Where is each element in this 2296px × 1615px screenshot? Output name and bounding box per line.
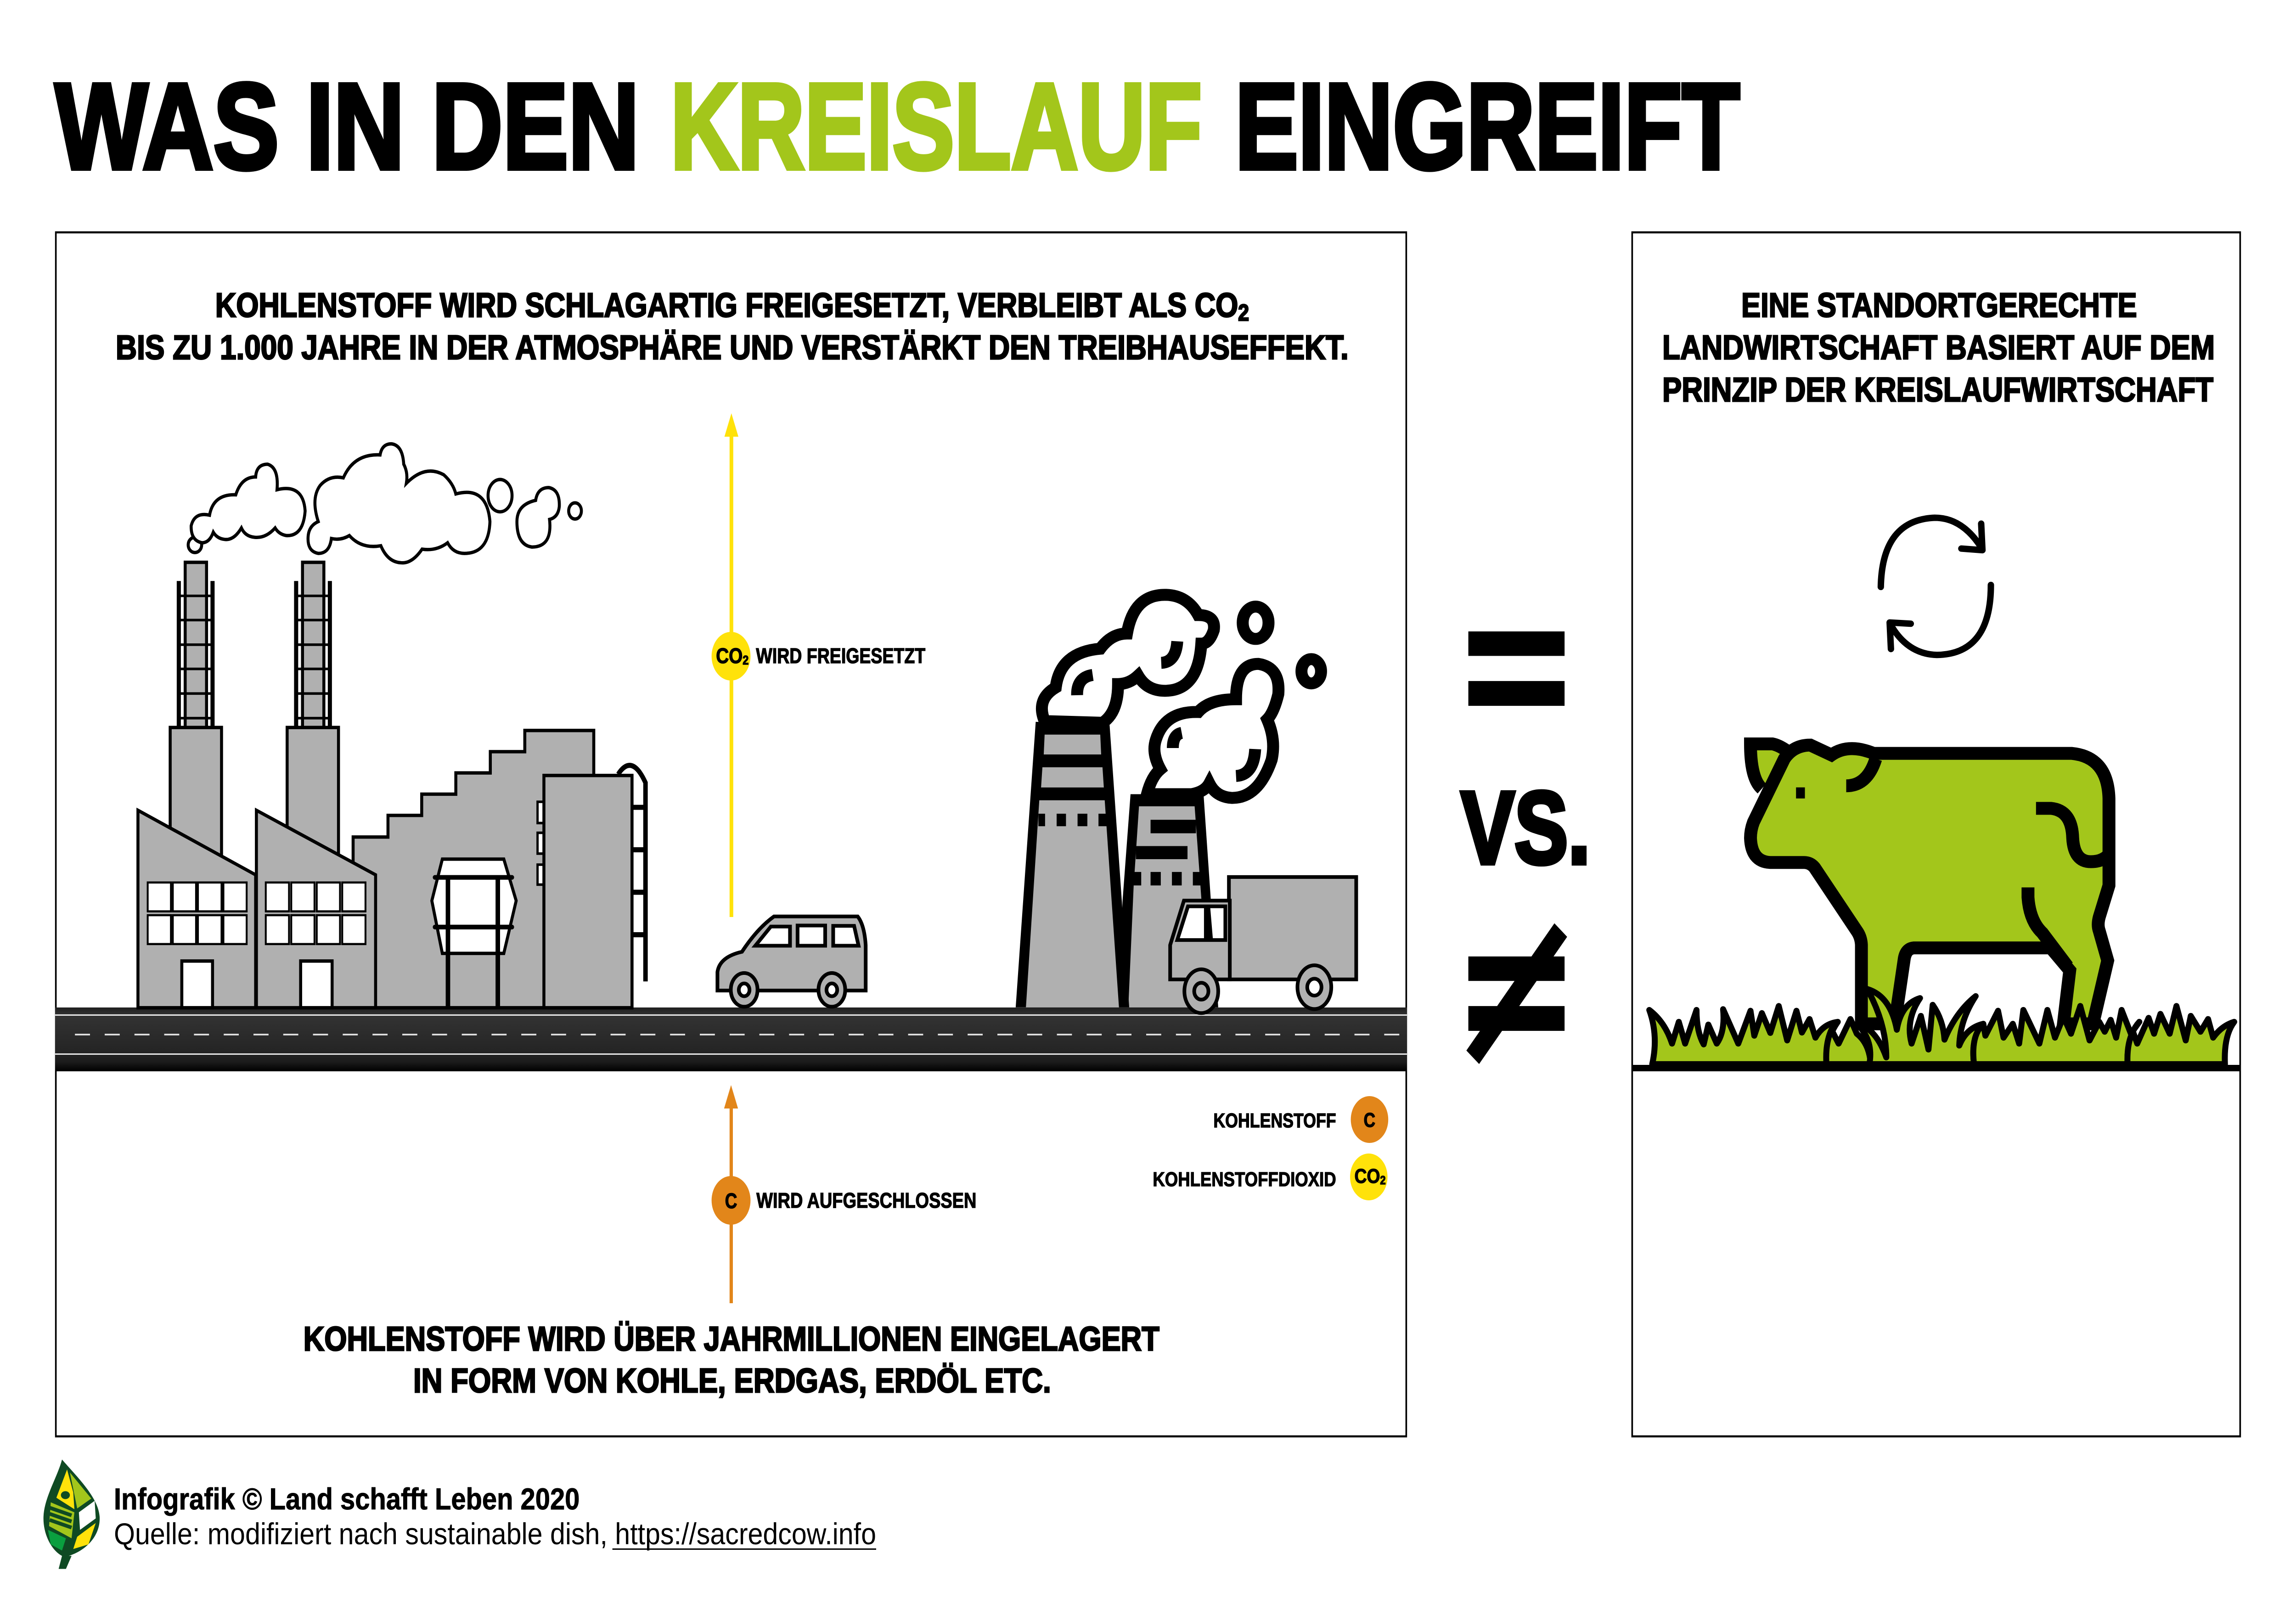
heading: carbon released <box>116 287 1349 367</box>
title: KREISLAUF <box>670 58 1202 195</box>
label: CO2 released: 2 <box>743 653 748 668</box>
label: CO2 released <box>712 632 925 681</box>
heading: carbon released: 2 <box>1238 300 1249 326</box>
legend <box>1153 1096 1388 1200</box>
steam cloud rear <box>1147 664 1278 798</box>
heading: circular agriculture <box>1662 287 2215 409</box>
panel: circular agriculture <box>1632 232 2240 1436</box>
cooling tower front <box>1016 722 1129 1007</box>
heading: circular agriculture: PRINZIP DER KREISLAUFWIRTSCHAFT <box>1662 371 2213 409</box>
legend: CO <box>1355 1165 1379 1187</box>
title: EINGREIFT <box>1235 58 1740 195</box>
shed building left <box>138 810 256 1008</box>
legend: KOHLENSTOFF <box>1213 1109 1336 1132</box>
power plant and vehicles <box>717 595 1356 1013</box>
equals sign <box>1469 631 1564 706</box>
stepped factory hall <box>353 731 632 1008</box>
label: CO2 released: CO <box>716 644 741 668</box>
truck <box>1170 877 1356 1013</box>
steam bubbles <box>1243 607 1321 683</box>
icon: cycle arrows <box>1881 518 1991 655</box>
ground line <box>1632 1065 2240 1071</box>
factory tower <box>544 776 632 1008</box>
arrow: CO2 released <box>725 413 738 917</box>
cooling tower rear <box>1119 794 1218 1007</box>
steam cloud front <box>1042 595 1214 723</box>
footer source: Quelle: modifiziert nach sustainable dish, https://sacredcow.info <box>114 1517 876 1551</box>
text: carbon stored: KOHLENSTOFF WIRD ÜBER JAHRMILLIONEN EINGELAGERT <box>304 1320 1159 1358</box>
label: carbon unlocked: C <box>725 1189 737 1213</box>
heading: carbon released: BIS ZU 1.000 JAHRE IN DER ATMOSPHÄRE UND VERSTÄRKT DEN TREIBHAUSEFFEKT. <box>116 329 1349 367</box>
grass <box>1649 989 2234 1064</box>
arrow: carbon unlocked <box>724 1085 738 1303</box>
text: carbon stored <box>304 1320 1159 1400</box>
label: carbon unlocked: WIRD AUFGESCHLOSSEN <box>756 1188 976 1212</box>
cow and circular arrows scene <box>1649 518 2234 1064</box>
heading: circular agriculture: LANDWIRTSCHAFT BASIERT AUF DEM <box>1662 329 2215 367</box>
icon: leaf logo <box>44 1459 100 1569</box>
icon: cow <box>1750 744 2109 1024</box>
legend: KOHLENSTOFFDIOXID <box>1153 1168 1336 1191</box>
heading: circular agriculture: EINE STANDORTGERECHTE <box>1741 287 2137 325</box>
road <box>55 1007 1407 1071</box>
panel: fossil carbon <box>56 232 1406 1436</box>
title: WAS IN DEN <box>55 58 639 195</box>
legend: 2 <box>1380 1174 1386 1187</box>
small side windows <box>538 802 544 884</box>
factory <box>138 444 646 1008</box>
service pipe and ladder <box>618 765 646 981</box>
factory chimney right <box>287 563 338 863</box>
hexagonal lantern <box>432 859 516 1008</box>
text: carbon stored: IN FORM VON KOHLE, ERDGAS, ERDÖL ETC. <box>413 1362 1051 1400</box>
footer credit: Infografik © Land schafft Leben 2020 <box>114 1482 580 1516</box>
shed building right <box>256 810 376 1008</box>
label: CO2 released: WIRD FREIGESETZT <box>756 644 925 668</box>
factory chimney left <box>170 563 221 863</box>
not equal sign <box>1466 923 1567 1064</box>
vs text: VS. <box>1461 770 1590 885</box>
heading: carbon released: KOHLENSTOFF WIRD SCHLAGARTIG FREIGESETZT, VERBLEIBT ALS CO <box>215 287 1176 325</box>
title <box>55 58 1740 195</box>
legend: C <box>1364 1109 1375 1131</box>
van <box>717 917 866 1007</box>
label: carbon unlocked <box>712 1176 976 1225</box>
smoke clouds <box>188 444 581 563</box>
